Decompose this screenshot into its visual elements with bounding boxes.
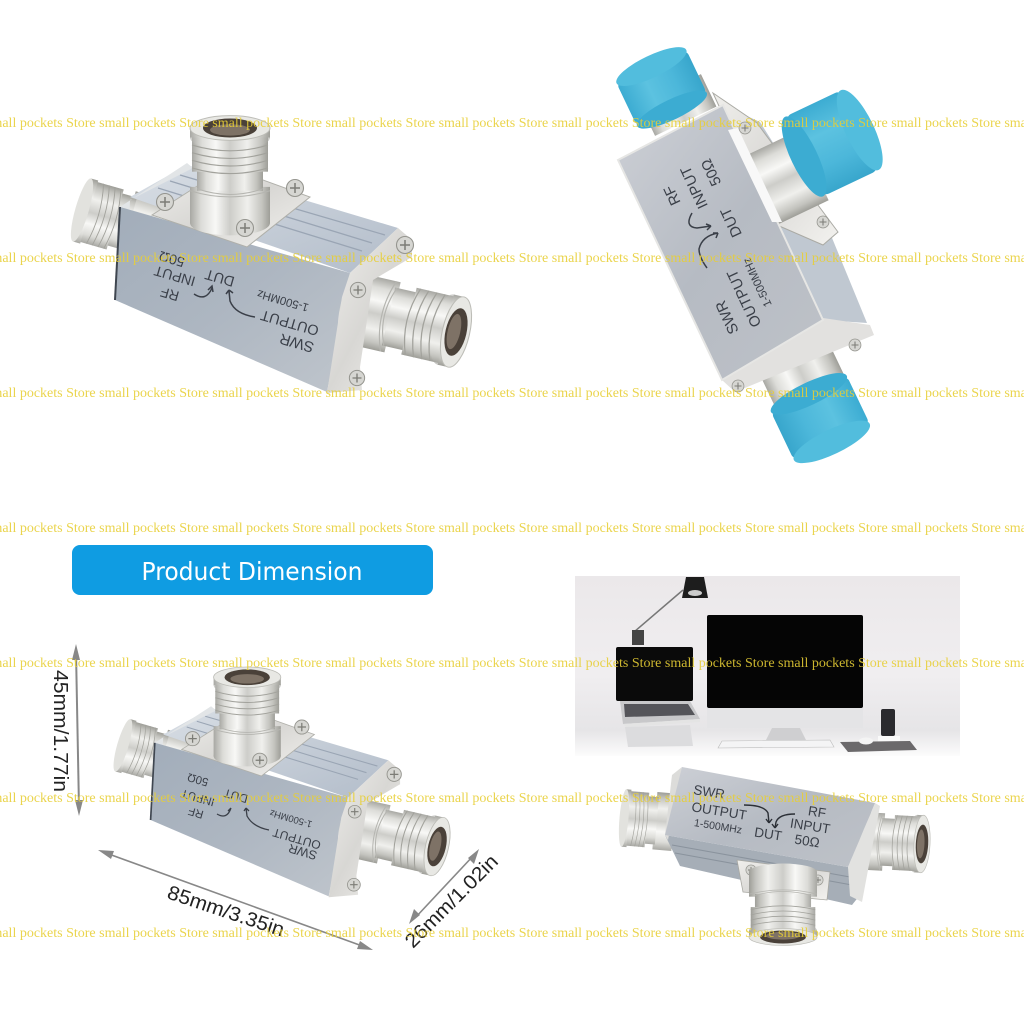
laptop (616, 647, 700, 747)
right connector neck (745, 132, 829, 224)
device label text: front view coupler: RF (807, 803, 827, 821)
side of housing (723, 105, 867, 323)
left connector (617, 789, 676, 851)
device label text: dimensioned coupler: 1-500MHz (268, 807, 314, 829)
flange (737, 860, 830, 900)
device label text: dimensioned coupler: 50Ω (186, 770, 210, 788)
heading button: Product Dimension (72, 545, 433, 595)
dimension label: length: 85mm/3.35in (164, 882, 287, 941)
device label text: top left coupler: DUT (203, 265, 236, 289)
device photo: coupler top view (66, 116, 477, 393)
device label text: top left coupler: 50Ω (157, 248, 186, 271)
dimension label: height: 45mm/1.77in (49, 670, 71, 792)
bottom connector (749, 864, 817, 945)
device label text: top left coupler: OUTPUT (259, 306, 321, 338)
front face (618, 105, 823, 380)
keyboard (718, 740, 834, 748)
monitor (707, 615, 863, 740)
device label text: dimensioned coupler: DUT (221, 785, 250, 806)
device label text: blue cap coupler (661, 156, 775, 337)
device label text: top left coupler (152, 248, 321, 356)
right connector (851, 812, 932, 873)
dimension arrow: width (409, 849, 479, 924)
flange (713, 93, 838, 245)
device label text: dimensioned coupler: INPUT (180, 786, 216, 807)
device label text: front view coupler (691, 782, 831, 850)
white strip (728, 128, 782, 222)
device label text: front view coupler: 50Ω (794, 832, 821, 850)
device photo: coupler with blue caps (612, 40, 892, 471)
end plate (848, 803, 880, 902)
device label text: blue cap coupler: INPUT (677, 163, 712, 211)
device label text: front view coupler: INPUT (789, 815, 831, 837)
device label text: top left coupler: 1-500MHz (256, 287, 310, 313)
device label text: blue cap coupler: 50Ω (698, 156, 725, 188)
device photo: coupler front view (617, 767, 932, 945)
dimension arrow: length (98, 850, 373, 950)
device label text: dimensioned coupler: RF (187, 804, 205, 820)
blue cap right (773, 84, 892, 202)
device label text: front view coupler: SWR (692, 782, 726, 802)
device label text: front view coupler: OUTPUT (691, 799, 748, 823)
device label text: blue cap coupler: RF (661, 183, 684, 208)
front face (665, 767, 875, 867)
device label text: front view coupler: DUT (753, 824, 783, 844)
desk lamp (632, 577, 708, 645)
blue cap left (612, 40, 711, 135)
device label text: blue cap coupler: SWR (712, 298, 743, 337)
phone (878, 709, 900, 744)
device label text: dimensioned coupler: SWR (287, 841, 319, 862)
dimension label: width: 26mm/1.02in (401, 851, 503, 953)
heading button: Product Dimension: Product Dimension (142, 557, 362, 586)
photo: desk scene with laptop and monitor (575, 576, 960, 756)
device label text: blue cap coupler: 1-500MHz (741, 255, 775, 309)
device label text: blue cap coupler: OUTPUT (724, 267, 765, 330)
device label text: top left coupler: SWR (278, 329, 316, 356)
blue cap bottom (766, 365, 875, 471)
device label text: dimensioned coupler (180, 770, 322, 862)
lower side (665, 835, 860, 905)
device label text: front view coupler: 1-500MHz (693, 817, 743, 836)
end plate (722, 318, 874, 392)
mouse pad (840, 738, 917, 752)
device label text: blue cap coupler: DUT (717, 205, 746, 240)
dimension arrow: height (72, 644, 83, 816)
connector necks (640, 74, 847, 413)
device label text: top left coupler: RF (158, 284, 181, 305)
device photo: dimensioned coupler (110, 667, 455, 897)
device label text: top left coupler: INPUT (152, 263, 197, 290)
device label text: dimensioned coupler: OUTPUT (270, 825, 322, 852)
